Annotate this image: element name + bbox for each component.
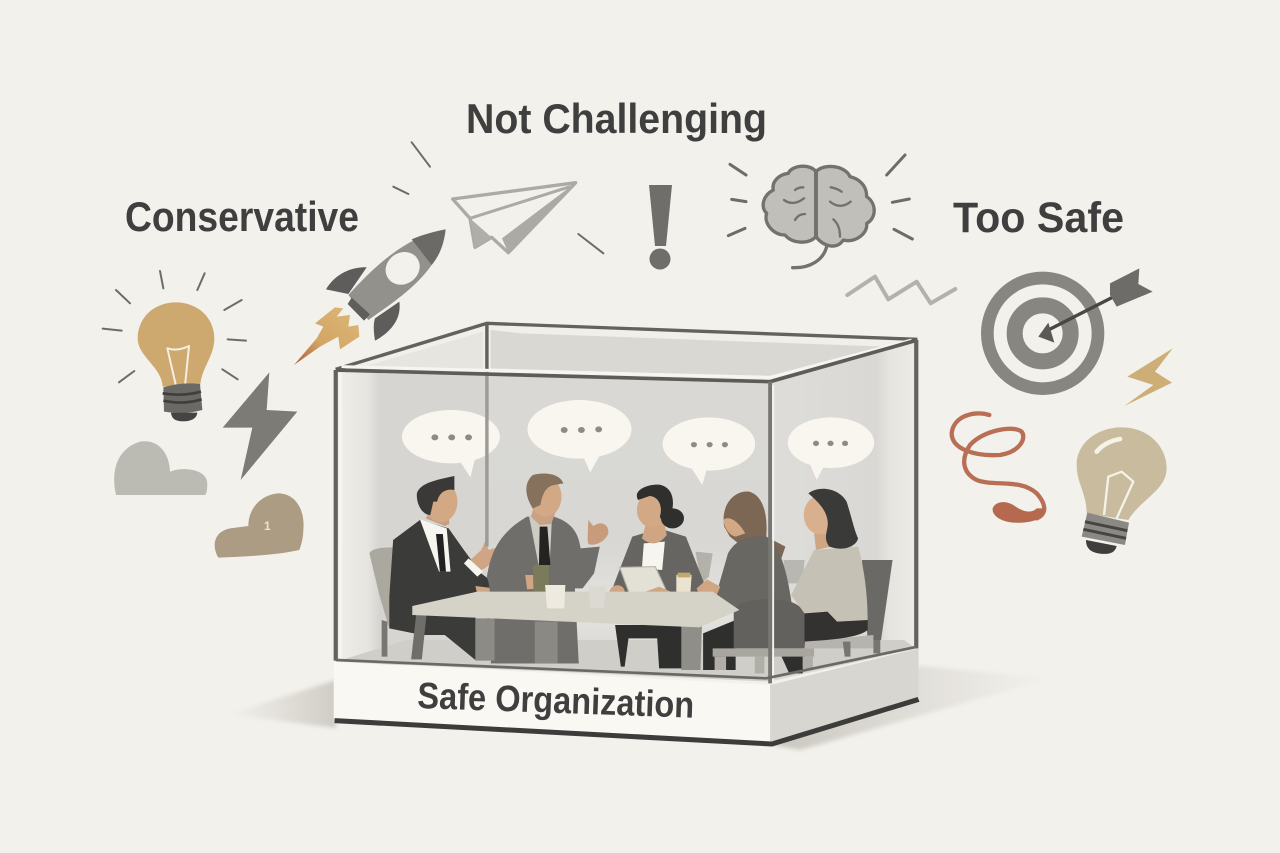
label: Safe Organization: Safe Organization [417,675,695,726]
left icon cluster [103,142,603,558]
brain radiating lines [728,155,912,239]
base plinth [334,648,919,744]
speech bubble 3 [663,417,755,485]
person 5 [791,489,868,642]
icon: target with arrow [987,268,1153,389]
icon: tan cloud: 1 [264,519,271,533]
glass display case [334,323,919,744]
title: Not Challenging: Not Challenging [466,95,767,142]
heading: Too Safe: Too Safe [953,194,1124,242]
person 2 [485,473,608,663]
person 3 [609,485,704,668]
icon: gray cloud [114,441,207,495]
red spiral scribble [952,413,1045,523]
icon: paper plane [453,183,576,253]
paper plane motion strokes [393,142,603,253]
table items [545,585,606,608]
icon: small gold bolt [1124,348,1173,406]
ground shadow [228,666,1052,750]
speech bubble 2 [527,400,632,473]
left bulb rays [103,271,246,382]
glass interior walls [336,323,917,682]
glass frame edges [336,323,917,683]
icon: left light bulb [138,302,214,421]
icon: lightning bolt [223,372,297,480]
chairs behind people [369,547,893,657]
table [411,592,739,670]
speech bubble 1 [402,410,500,477]
icon: rocket [294,229,446,365]
right icon cluster [728,155,1173,554]
icon: tan cloud [215,493,304,558]
icon: right light bulb [1077,427,1167,554]
heading: Conservative: Conservative [125,193,359,240]
icon: brain [763,166,874,268]
squiggle line [847,277,955,303]
icon: exclamation mark [649,185,672,270]
person 1 [389,476,501,660]
speech bubble 4 [788,417,874,480]
person 4 [697,492,814,673]
